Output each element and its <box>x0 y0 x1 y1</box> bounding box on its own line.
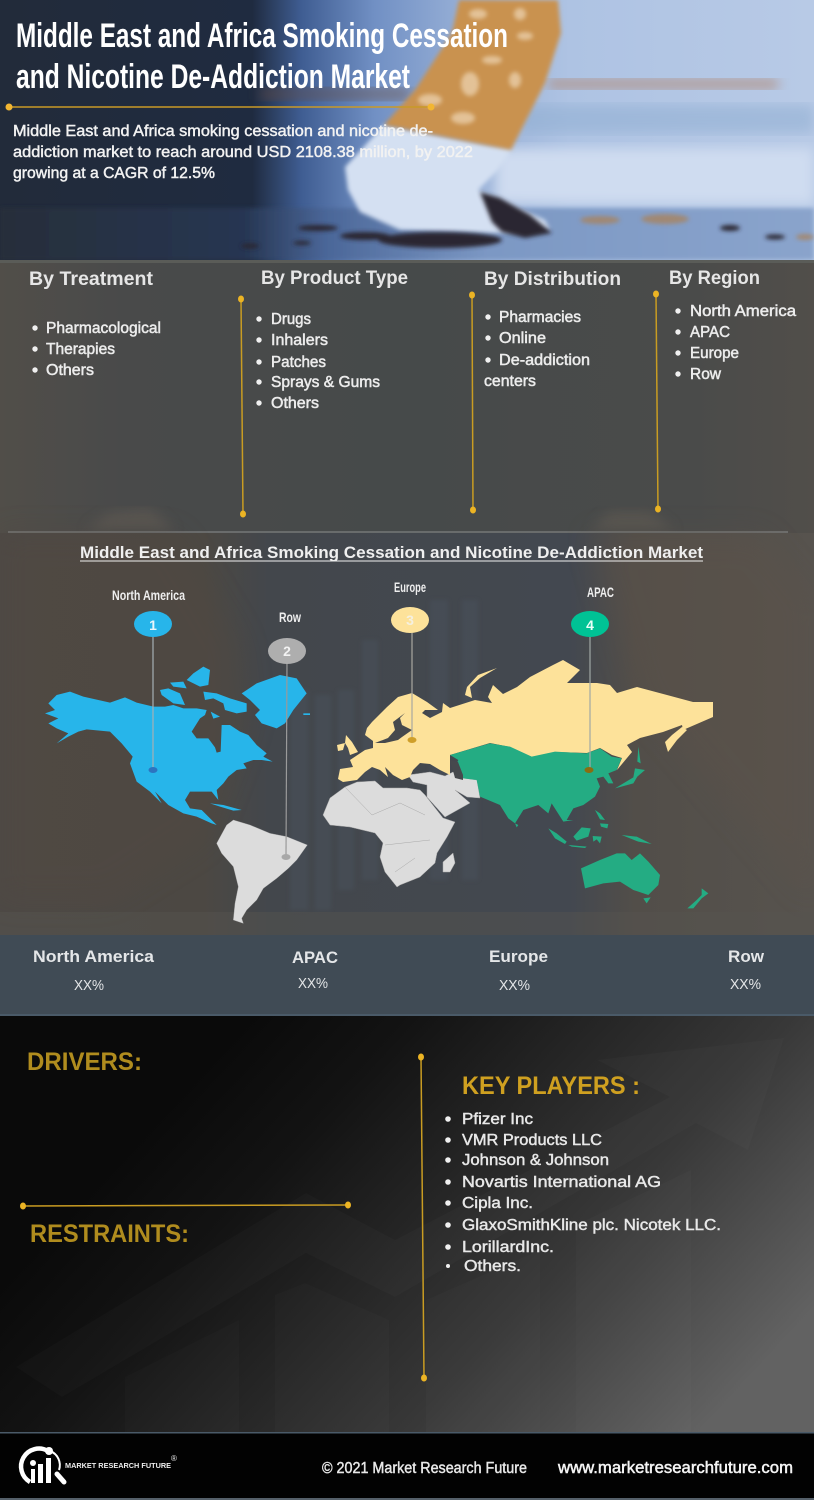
list: key players: Cipla Inc. <box>462 1195 533 1212</box>
map region: Europe and Russia <box>337 660 713 782</box>
list: Inhalers <box>271 332 328 349</box>
list: North America <box>690 303 796 320</box>
marker 2: Row <box>268 609 306 860</box>
copyright: © 2021 Market Research Future <box>322 1460 527 1477</box>
panel: by region <box>669 268 796 383</box>
marker 3: Europe: 3 <box>406 612 414 628</box>
stat: Europe: Europe <box>489 947 548 966</box>
logo text: ® <box>171 1454 177 1463</box>
stat: Europe <box>489 947 548 994</box>
subtitle text: growing at a CAGR of 12.5% <box>13 165 215 182</box>
panel: segments background <box>0 260 814 535</box>
logo icon <box>21 1447 64 1483</box>
world map <box>45 660 713 923</box>
stat: North America: North America <box>33 947 155 966</box>
heading: map title: Middle East and Africa Smoking Cessation and Nicotine De-Addiction Market <box>80 543 703 562</box>
subtitle text <box>13 123 473 182</box>
list: Drugs <box>271 311 311 328</box>
marker 1: North America: 1 <box>149 617 157 633</box>
list: key players: GlaxoSmithKline plc. Nicotek LLC. <box>462 1217 721 1234</box>
panel: by distribution <box>484 269 621 390</box>
gold divider <box>653 290 661 512</box>
panel: drivers, restraints, key players <box>0 1014 814 1433</box>
heading: key players: KEY PLAYERS : <box>462 1072 640 1100</box>
marker 4: APAC: 4 <box>586 617 594 633</box>
panel: regional stats <box>0 935 814 1015</box>
map region: Asia Pacific <box>450 743 708 908</box>
marker 3: Europe: Europe <box>394 579 426 595</box>
subtitle text: addiction market to reach around USD 2108.38 million, by 2022 <box>13 144 473 161</box>
stat: Row <box>728 947 765 993</box>
heading: By Product Type <box>261 268 408 289</box>
list: Pharmacological <box>46 320 161 337</box>
gold title divider <box>6 104 434 110</box>
panel: by treatment <box>29 269 161 379</box>
ash debris <box>241 192 785 248</box>
heading: restraints: RESTRAINTS: <box>30 1220 189 1248</box>
icon: cigarette filter <box>384 0 561 150</box>
heading: By Region <box>669 268 760 289</box>
stat: APAC: XX% <box>298 975 328 992</box>
list: Row <box>690 366 722 383</box>
title: and Nicotine De-Addiction Market <box>16 58 410 96</box>
marker 3: Europe <box>391 579 429 743</box>
title <box>16 17 508 96</box>
heading: By Treatment <box>29 269 154 290</box>
marker 1: North America <box>112 587 185 773</box>
subtitle text: Middle East and Africa smoking cessation and nicotine de- <box>13 123 433 140</box>
list: APAC <box>690 324 730 341</box>
gold divider <box>418 1054 427 1382</box>
list: Europe <box>690 345 739 362</box>
stat: Europe: XX% <box>499 977 530 994</box>
panel: header photo <box>0 0 814 260</box>
list: Others <box>46 362 94 379</box>
list <box>484 309 590 390</box>
stat: Row: XX% <box>730 976 761 993</box>
Baltic sea cutout <box>375 713 412 743</box>
marker 2: Row: 2 <box>283 643 291 659</box>
list <box>256 311 380 412</box>
list: De-addiction <box>499 352 590 369</box>
list: key players: LorillardInc. <box>462 1239 554 1256</box>
panel: by product type <box>256 268 408 412</box>
stat: North America: XX% <box>74 977 104 994</box>
list: Pharmacies <box>499 309 581 326</box>
heading: drivers: DRIVERS: <box>27 1048 142 1076</box>
gold divider <box>469 292 476 514</box>
list <box>32 320 161 379</box>
panel: map section <box>0 532 814 935</box>
list: Therapies <box>46 341 115 358</box>
list <box>675 303 796 383</box>
marker 4: APAC: APAC <box>587 584 614 600</box>
stat: North America <box>33 947 155 994</box>
stat: APAC: APAC <box>292 948 338 967</box>
website: www.marketresearchfuture.com <box>557 1459 793 1477</box>
logo text: MARKET RESEARCH FUTURE <box>65 1461 171 1470</box>
logo text <box>65 1454 177 1470</box>
list: key players: Johnson & Johnson <box>462 1152 609 1169</box>
marker 2: Row: Row <box>279 609 301 625</box>
marker 4: APAC <box>571 584 614 773</box>
icon: cigarette ash stub <box>345 125 550 233</box>
gold divider <box>20 1202 351 1210</box>
list: key players: Novartis International AG <box>462 1174 661 1191</box>
marker 1: North America: North America <box>112 587 185 603</box>
list: Sprays & Gums <box>271 374 380 391</box>
list: Patches <box>271 354 326 371</box>
list: key players: VMR Products LLC <box>462 1132 602 1149</box>
list: key players: Others. <box>464 1258 521 1275</box>
map region: South America <box>217 820 307 923</box>
map region: Africa and Middle East <box>323 772 480 887</box>
stat: APAC <box>292 948 338 992</box>
list: Online <box>499 330 546 347</box>
gold divider <box>238 296 246 518</box>
title: Middle East and Africa Smoking Cessation <box>16 17 508 55</box>
Caspian sea cutout <box>450 760 463 780</box>
panel: footer <box>0 1432 814 1500</box>
heading: By Distribution <box>484 269 621 290</box>
list: key players: Pfizer Inc <box>462 1111 533 1128</box>
list: Others <box>271 395 319 412</box>
list: centers <box>484 373 536 390</box>
stat: Row: Row <box>728 947 765 966</box>
map region: North America <box>45 667 310 825</box>
list: key players <box>445 1111 721 1275</box>
